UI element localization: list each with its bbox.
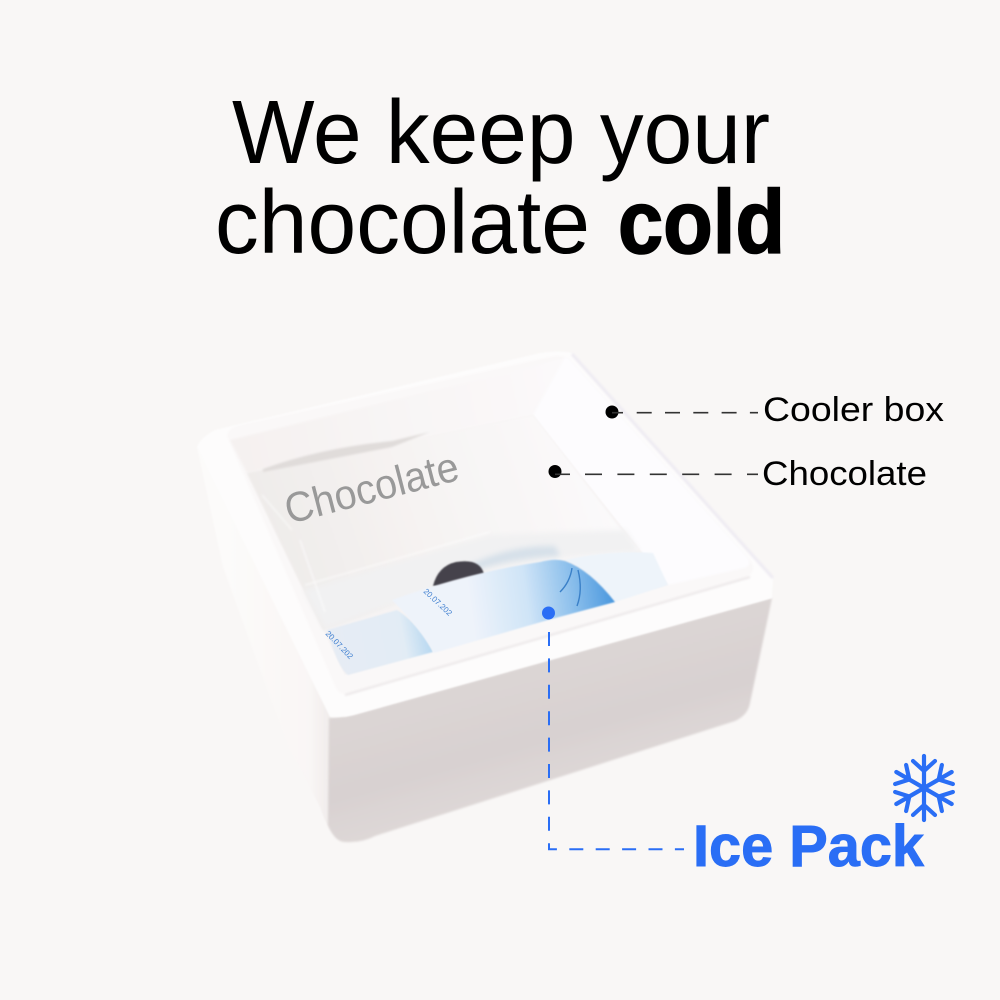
blue shadow above ice pack bbox=[470, 546, 560, 572]
box: back right rim edge bbox=[572, 354, 773, 578]
callout: chocolate bbox=[548, 455, 927, 493]
box: front outer wall bbox=[328, 598, 772, 842]
ice pack: lower left bbox=[327, 610, 433, 675]
ice pack text left: 20.07.202 bbox=[324, 629, 355, 661]
ice pack text main: 20.07.202 bbox=[422, 587, 454, 618]
title: cold bbox=[618, 173, 785, 273]
ice pack label: Ice Pack bbox=[693, 814, 924, 879]
icon: snowflake bbox=[891, 756, 957, 820]
callout: ice pack leader bbox=[542, 606, 684, 849]
ice pack: right white bbox=[565, 552, 668, 602]
cooler box photo bbox=[197, 352, 773, 842]
box: lip shadow bbox=[345, 577, 750, 695]
plastic wrap lower fold bbox=[303, 530, 640, 630]
callout: cooler box bbox=[606, 391, 944, 429]
chocolate label on pack: Chocolate bbox=[279, 443, 464, 533]
ice pack crescent bbox=[560, 568, 580, 606]
plastic wrap top fold bbox=[263, 432, 430, 472]
box: inner lip bbox=[227, 356, 753, 694]
callout: chocolate: Chocolate bbox=[762, 455, 927, 493]
box: inner right wall bbox=[533, 357, 749, 585]
ice pack: main bbox=[392, 560, 615, 653]
dark object bbox=[433, 561, 484, 590]
title: chocolate bbox=[215, 173, 590, 273]
plastic wrap highlights bbox=[262, 495, 490, 612]
chocolate wrapped pack bbox=[247, 415, 640, 630]
box: inner back wall bbox=[230, 358, 565, 473]
title bbox=[215, 83, 785, 273]
box: left outer wall bbox=[197, 447, 345, 840]
box: rim bbox=[197, 352, 773, 717]
callout: cooler box: Cooler box bbox=[763, 391, 944, 429]
title: We keep your bbox=[232, 83, 770, 183]
cavity floor bbox=[247, 415, 668, 675]
